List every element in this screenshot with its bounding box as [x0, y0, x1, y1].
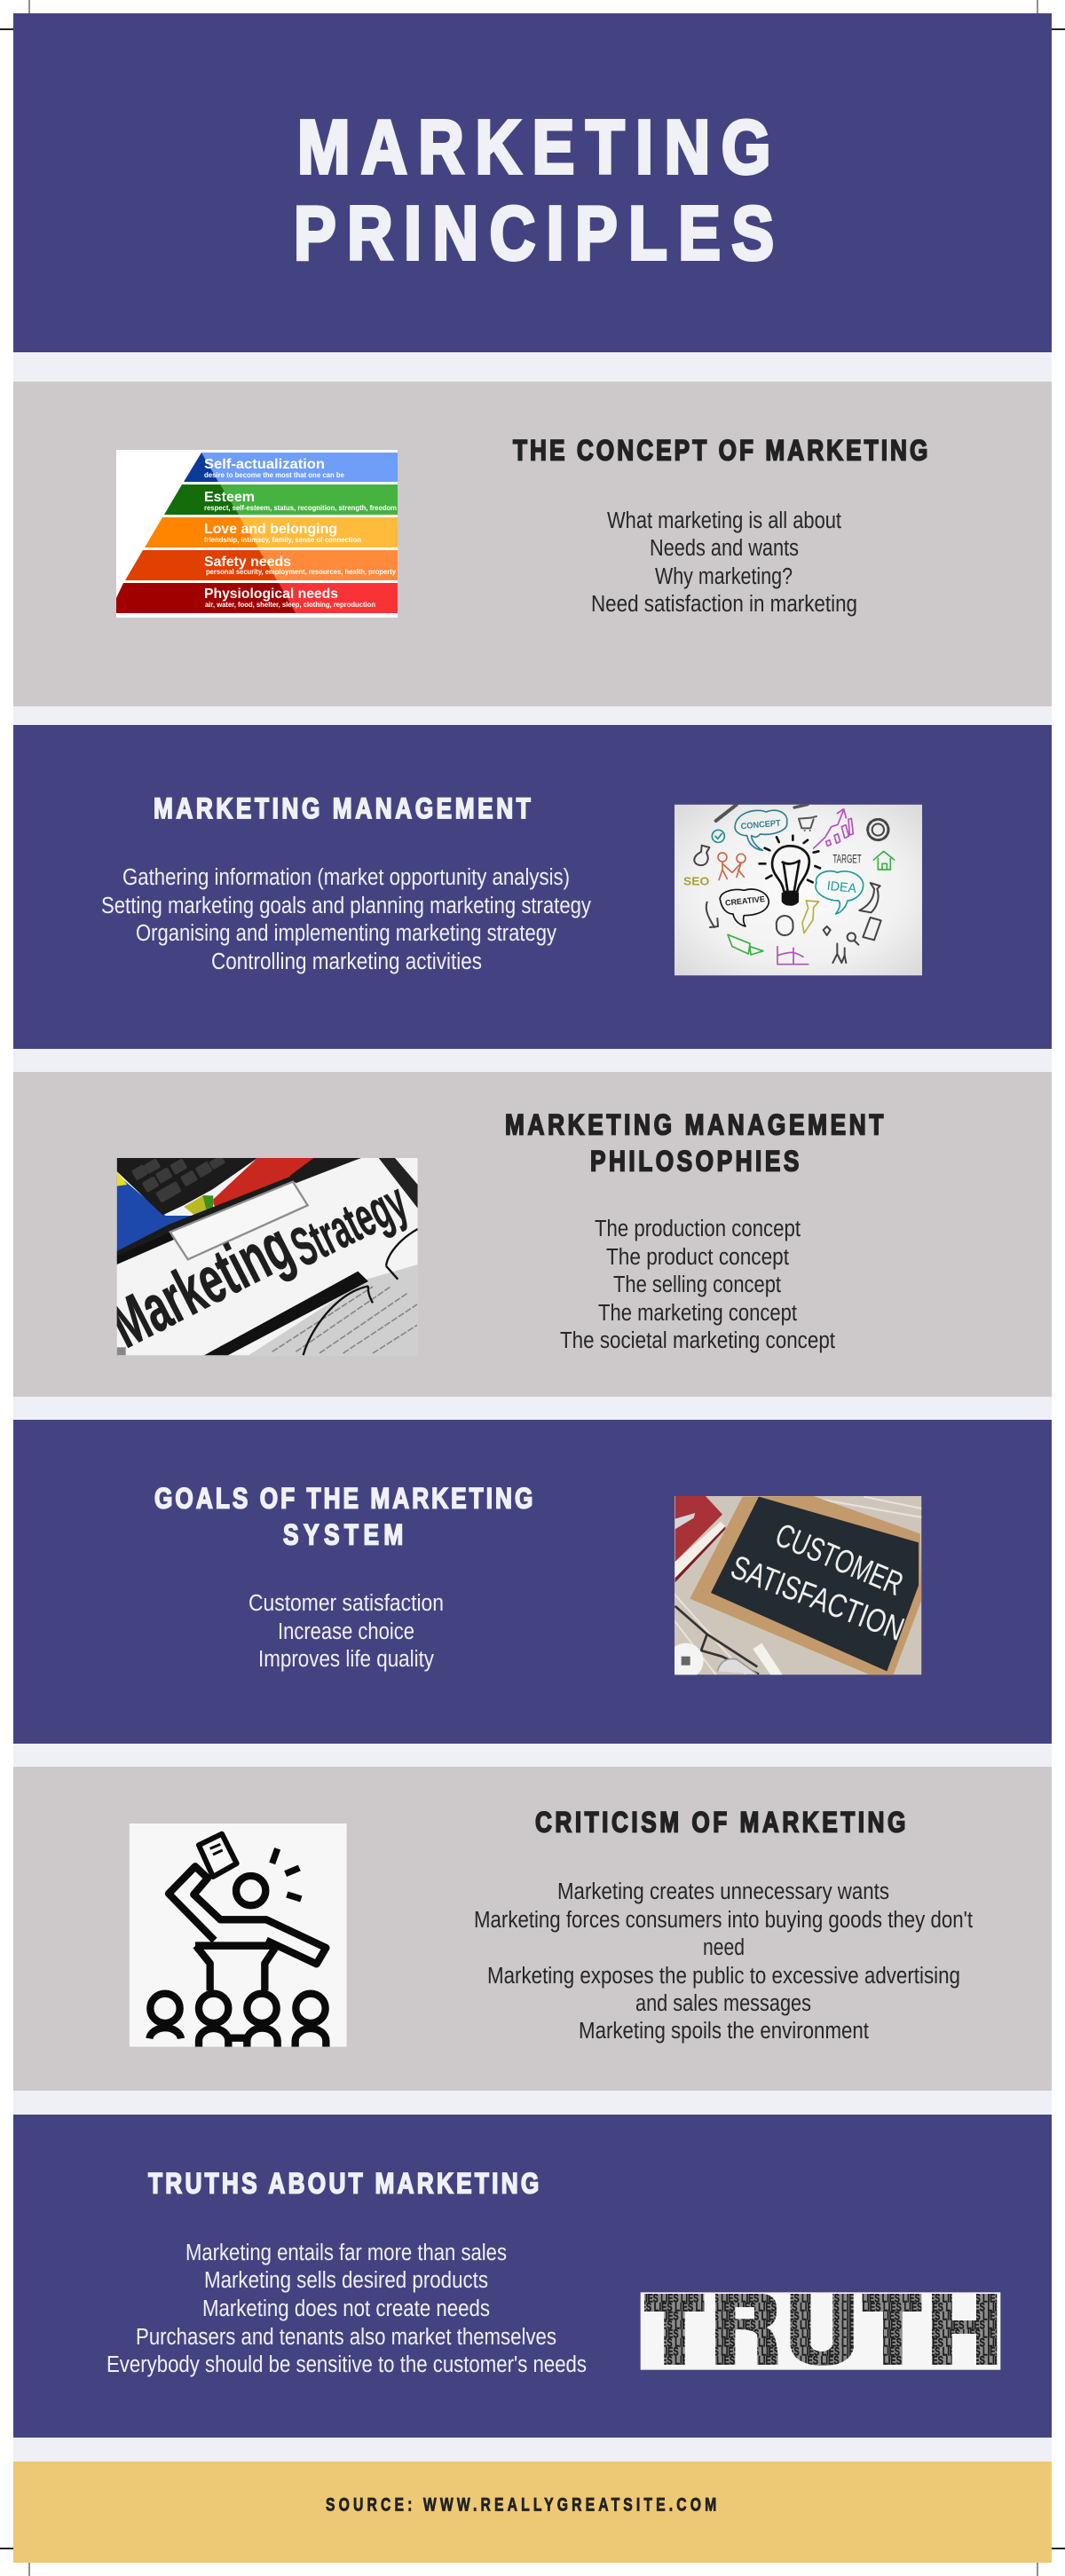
text block [474, 1879, 973, 2044]
image: marketing strategy clipboard: Marketing [99, 1208, 304, 1361]
text block: Purchasers and tenants also market themselves [136, 2325, 556, 2350]
title banner [13, 13, 1052, 352]
image: idea doodles with light bulb: IDEA [826, 879, 857, 896]
image: idea doodles with light bulb: SEO [683, 874, 709, 887]
title: PRINCIPLES [294, 191, 774, 275]
text block: Marketing entails far more than sales [185, 2241, 507, 2265]
text block [560, 1217, 835, 1353]
image: customer satisfaction chalkboard: CUSTOMER [770, 1516, 909, 1603]
panel: marketing management [13, 725, 1052, 1049]
text block: The production concept [595, 1217, 801, 1241]
text block: Customer satisfaction [248, 1591, 444, 1616]
image: Maslow pyramid: Physiological needs [204, 587, 338, 602]
heading: GOALS OF THE MARKETING [154, 1484, 532, 1515]
image: idea doodles with light bulb: CREATIVE [724, 894, 765, 908]
image: Maslow pyramid: desire to become the most that one can be [204, 471, 345, 479]
icon: speaker at podium with audience [130, 1824, 347, 2047]
text block: Gathering information (market opportunity analysis) [122, 865, 570, 890]
image: idea doodles with light bulb: CONCEPT [740, 818, 781, 831]
heading: MARKETING MANAGEMENT [154, 794, 531, 825]
text block: The selling concept [613, 1272, 781, 1297]
text block: Controlling marketing activities [211, 949, 482, 974]
heading: CRITICISM OF MARKETING [535, 1808, 905, 1839]
text block: need [703, 1935, 745, 1960]
image: marketing strategy clipboard: Strategy [282, 1171, 416, 1279]
image: idea doodles with light bulb: TARGET [832, 852, 862, 866]
text block: Marketing does not create needs [202, 2296, 490, 2321]
text block: What marketing is all about [607, 508, 841, 533]
image: Maslow pyramid: Esteem [204, 490, 255, 505]
panel: marketing management philosophies [13, 1072, 1052, 1397]
text block: The marketing concept [598, 1301, 797, 1326]
text block: Marketing spoils the environment [579, 2019, 869, 2044]
image: customer satisfaction chalkboard [668, 1496, 921, 1679]
image: Maslow pyramid: respect, self-esteem, status, recognition, strength, freedom [204, 504, 397, 512]
image: Maslow pyramid [116, 450, 398, 618]
title [294, 105, 774, 275]
heading [154, 1484, 532, 1551]
text block [101, 865, 591, 974]
text block: Setting marketing goals and planning marketing strategy [101, 894, 591, 918]
image: Maslow pyramid: Love and belonging [204, 522, 337, 537]
text block: Need satisfaction in marketing [591, 592, 857, 617]
text block [248, 1591, 444, 1672]
image: Maslow pyramid: friendship, intimacy, family, sense of connection [204, 536, 361, 544]
text block: Why marketing? [655, 564, 793, 589]
heading [505, 1110, 884, 1178]
image: Maslow pyramid: air, water, food, shelter, sleep, clothing, reproduction [205, 601, 375, 609]
text block: The product concept [606, 1245, 789, 1270]
text block: Marketing sells desired products [204, 2268, 488, 2293]
image: Maslow pyramid: personal security, employment, resources, health, property [206, 568, 397, 576]
text block: Organising and implementing marketing strategy [136, 921, 556, 946]
text block: Everybody should be sensitive to the customer's needs [106, 2352, 587, 2377]
panel: truths about marketing [13, 2115, 1052, 2438]
footer band [13, 2462, 1052, 2563]
text block: Increase choice [278, 1619, 414, 1644]
text block: Marketing exposes the public to excessive advertising [487, 1964, 960, 1989]
panel: criticism of marketing [13, 1767, 1052, 2091]
heading: SYSTEM [283, 1520, 403, 1551]
text block: Needs and wants [650, 536, 799, 561]
text block: Marketing forces consumers into buying goods they don't [474, 1908, 973, 1933]
image: customer satisfaction chalkboard: SATISFACTION [726, 1548, 910, 1648]
text block: Marketing creates unnecessary wants [557, 1879, 889, 1904]
text block [106, 2241, 587, 2377]
heading: THE CONCEPT OF MARKETING [513, 436, 927, 467]
text block: Improves life quality [258, 1647, 434, 1672]
image: TRUTH word made of LIES [633, 2290, 1006, 2370]
image: idea doodles with light bulb [674, 805, 922, 975]
text block: and sales messages [635, 1991, 811, 2016]
text block: The societal marketing concept [560, 1328, 835, 1353]
panel: goals of the marketing system [13, 1420, 1052, 1744]
panel: the concept of marketing [13, 382, 1052, 706]
title: MARKETING [297, 105, 770, 189]
heading: PHILOSOPHIES [590, 1146, 799, 1178]
heading: MARKETING MANAGEMENT [505, 1110, 884, 1141]
source line: SOURCE: WWW.REALLYGREATSITE.COM [326, 2493, 716, 2515]
image: Maslow pyramid: Safety needs [204, 555, 291, 570]
text block [591, 508, 857, 617]
image: Maslow pyramid: Self-actualization [204, 457, 325, 472]
heading: TRUTHS ABOUT MARKETING [148, 2169, 539, 2200]
